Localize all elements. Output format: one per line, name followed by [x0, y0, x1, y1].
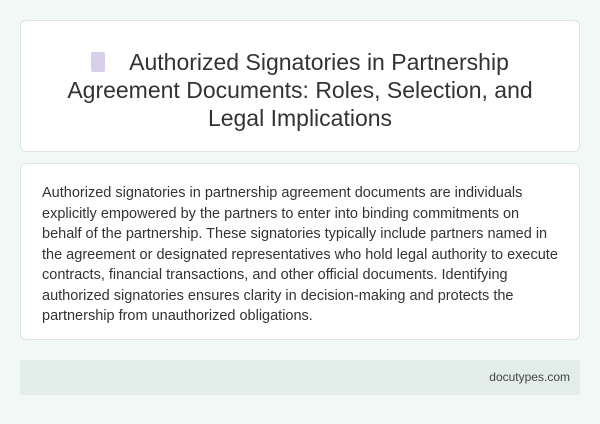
text block: partnership from unauthorized obligations.: [42, 308, 313, 324]
icon: document: [91, 52, 105, 72]
footer: [20, 360, 580, 395]
text block: authorized signatories ensures clarity in decision-making and protects the: [42, 288, 514, 304]
text block: the agreement or designated representatives who hold legal authority to execute: [42, 246, 558, 262]
title: Authorized Signatories in Partnership Agreement Documents: Roles, Selection, and Legal Implications: [67, 49, 533, 131]
text block: behalf of the partnership. These signatories typically include partners named in: [42, 226, 547, 242]
text block: Authorized signatories in partnership agreement documents are individuals: [42, 185, 522, 201]
text block: explicitly empowered by the partners to enter into binding commitments on: [42, 206, 519, 222]
panel: description: [20, 163, 580, 340]
text block: [42, 185, 558, 324]
footer: docutypes.com: [489, 370, 570, 384]
panel: title card: [20, 20, 580, 152]
text block: contracts, financial transactions, and other official documents. Identifying: [42, 267, 508, 283]
